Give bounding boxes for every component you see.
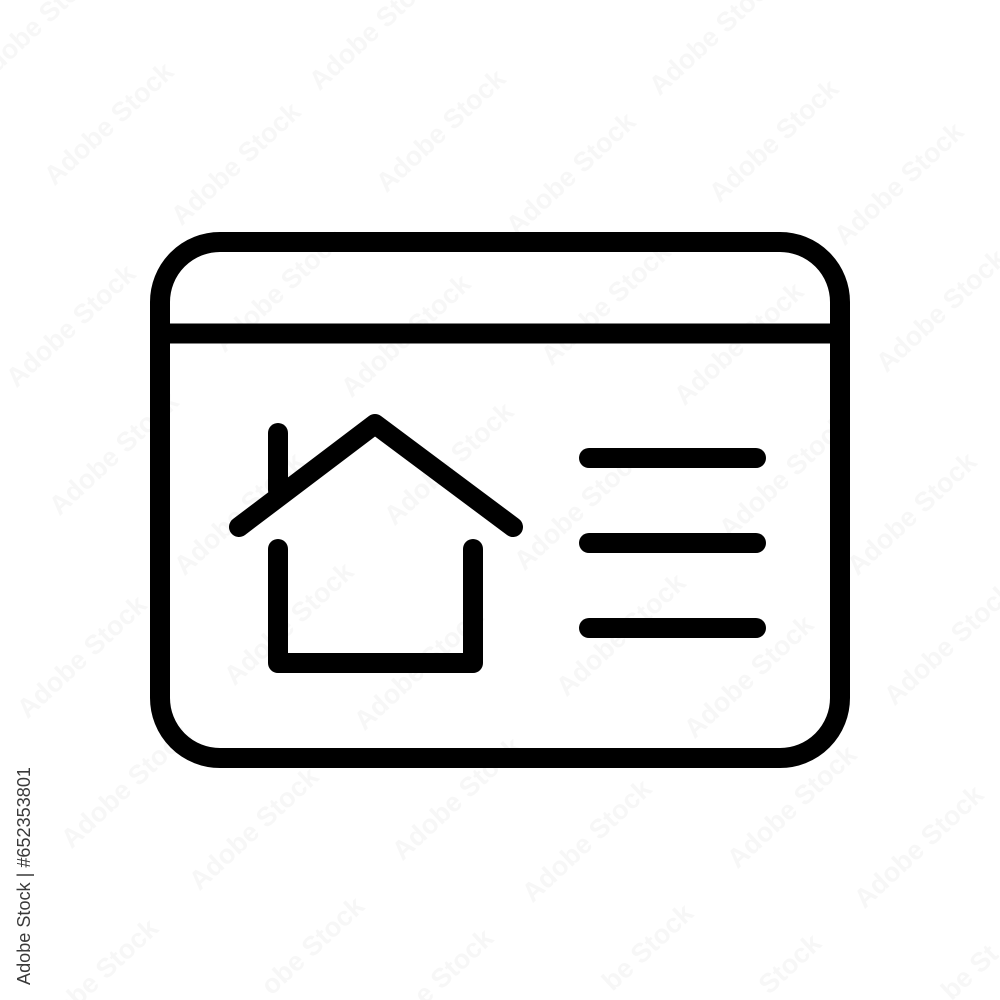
browser window frame — [160, 242, 840, 758]
watermark pattern: Adobe Stock — [828, 116, 970, 251]
watermark pattern: Adobe Stock — [0, 258, 142, 393]
house roof — [239, 424, 513, 527]
watermark pattern: Adobe Stock — [550, 567, 692, 702]
text lines of the listing — [589, 458, 756, 628]
house chimney — [268, 433, 288, 490]
browser title bar divider — [160, 324, 840, 344]
watermark pattern: Adobe Stock — [370, 63, 512, 198]
watermark pattern: Adobe Stock — [55, 719, 197, 854]
watermark pattern: Adobe Stock — [508, 441, 650, 576]
icon: property listing web page — [160, 242, 840, 758]
watermark pattern: Adobe Stock — [848, 779, 990, 914]
house walls — [278, 549, 473, 663]
watermark pattern: Adobe Stock — [38, 56, 180, 191]
watermark pattern: Adobe Stock — [386, 731, 528, 866]
watermark pattern: Adobe Stock — [841, 446, 983, 581]
watermark pattern: Adobe Stock — [516, 773, 658, 908]
watermark pattern: Adobe Stock — [335, 268, 477, 403]
watermark pattern: Adobe Stock — [43, 386, 185, 521]
watermark pattern: Adobe Stock — [678, 609, 820, 744]
watermark pattern: obe Stock — [255, 890, 371, 1000]
watermark pattern: Adobe Stock — [183, 761, 325, 896]
watermark pattern: Adobe Stock — [713, 409, 855, 544]
watermark pattern: Adobe Stock — [208, 223, 350, 358]
watermark pattern: Adobe Stock — [500, 106, 642, 241]
watermark pattern: Adobe Stock — [165, 96, 307, 231]
watermark pattern: Adobe Stock — [11, 589, 153, 724]
watermark pattern: Stock — [753, 927, 828, 1000]
watermark pattern: be Stock — [596, 897, 700, 996]
watermark pattern: Adobe Stock — [703, 73, 845, 208]
watermark pattern: Adobe Stock — [535, 236, 677, 371]
watermark pattern: Adobe Stock — [168, 446, 310, 581]
watermark pattern: Adobe Stock — [668, 276, 810, 411]
watermark pattern: Adobe Stock — [348, 601, 490, 736]
watermark pattern: Adobe Stock — [218, 556, 360, 691]
watermark pattern: Adobe Stock — [721, 739, 863, 874]
icon: house — [239, 424, 513, 663]
stock image credit: Adobe Stock | #652353801 — [14, 767, 34, 985]
watermark pattern: Adobe Stock — [378, 396, 520, 531]
